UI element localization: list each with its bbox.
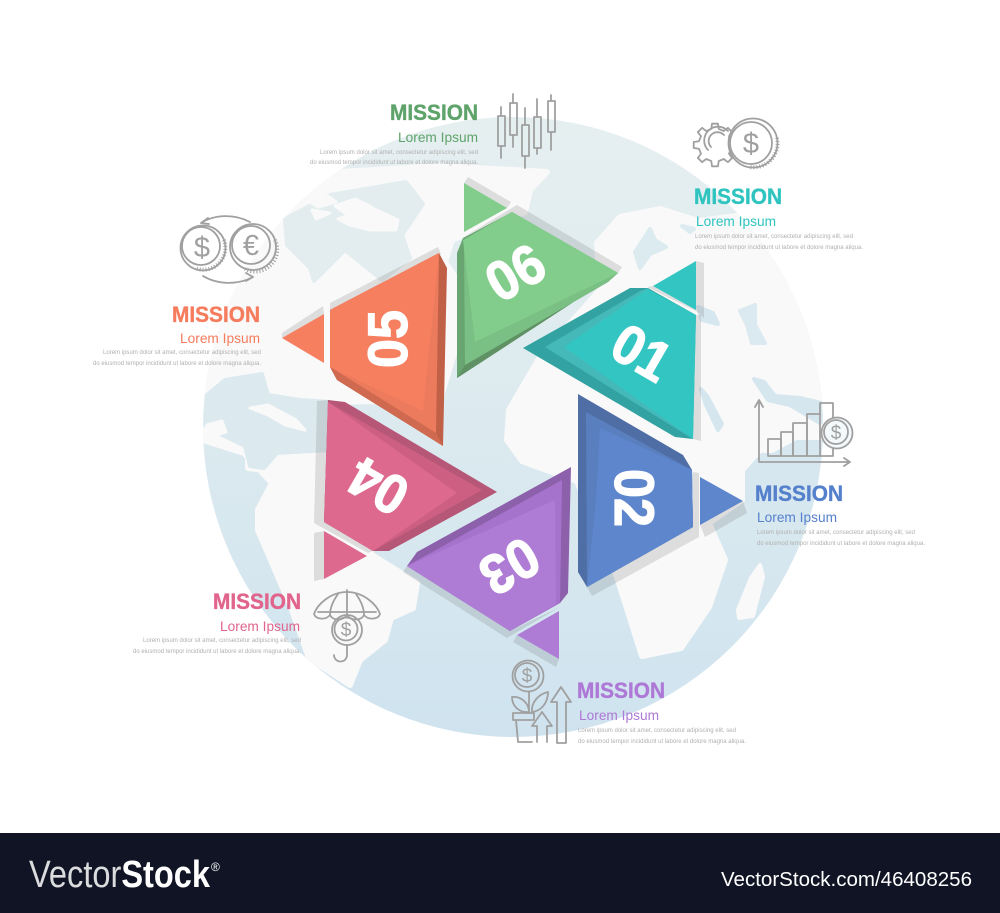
icon: bar chart with coin [755, 400, 852, 466]
number 04: 04 [337, 445, 419, 528]
panel: segment 03 [403, 467, 571, 667]
small marker shadow 03 [513, 635, 559, 667]
segment 01 body [523, 288, 696, 439]
text block: mission 03: Lorem ipsum dolor sit amet, consectetur adipiscing elit, sed [578, 727, 736, 734]
text block: mission 03: Lorem Ipsum [579, 707, 659, 723]
number 06: 06 [474, 231, 556, 314]
text block: mission 01: MISSION [694, 184, 782, 209]
text block: mission 02: Lorem Ipsum [757, 509, 837, 525]
text block: mission 04: Lorem Ipsum [220, 618, 300, 634]
segment 02 shadow [587, 472, 699, 596]
text block: mission 04: do eiusmod tempor incididunt ut labore et dolore magna aliqua. [133, 648, 301, 655]
text block: mission 03: MISSION [577, 678, 665, 703]
text block: mission 02: do eiusmod tempor incididunt ut labore et dolore magna aliqua. [757, 540, 925, 547]
segment 05 body [330, 253, 447, 446]
segment 04 body [324, 400, 497, 551]
number 01: 01 [601, 311, 683, 394]
text block: mission 01: do eiusmod tempor incididunt ut labore et dolore magna aliqua. [695, 244, 863, 251]
text block: mission 02 [755, 481, 925, 547]
segment 03 shadow [403, 566, 560, 638]
small marker shadow 04 [314, 531, 324, 581]
small marker shadow 06 [464, 177, 511, 208]
icon: umbrella over coin [314, 590, 380, 662]
footer registered mark: ® [211, 860, 220, 874]
small marker shadow 05 [282, 306, 324, 338]
text block: mission 06: Lorem Ipsum [398, 129, 478, 145]
text block: mission 06: Lorem ipsum dolor sit amet, consectetur adipiscing elit, sed [320, 149, 478, 156]
icon: currency exchange [180, 216, 277, 283]
segment 06 shadow [462, 205, 622, 273]
small marker shadow 01 [647, 261, 704, 318]
small marker 03 [517, 611, 559, 659]
small marker 02 [700, 477, 743, 525]
icon: gear and dollar coin [694, 118, 778, 168]
world globe background [190, 117, 840, 737]
text block: mission 03: do eiusmod tempor incididunt ut labore et dolore magna aliqua. [578, 738, 746, 745]
panel: segment 02 [578, 394, 747, 596]
icon: candlestick chart [498, 94, 555, 168]
text block: mission 05: do eiusmod tempor incididunt ut labore et dolore magna aliqua. [93, 360, 261, 367]
icon: gear and dollar coin: $ [743, 128, 759, 160]
text block: mission 04: Lorem ipsum dolor sit amet, consectetur adipiscing elit, sed [143, 637, 301, 644]
icon: coin plant with arrows: $ [522, 666, 533, 687]
segment 03 body [407, 467, 571, 631]
text block: mission 06 [310, 100, 478, 166]
panel: segment 04 [314, 400, 497, 581]
footer url: VectorStock.com/46408256 [721, 869, 972, 891]
icon: currency exchange: € [243, 230, 259, 262]
icon: bar chart with coin: $ [831, 423, 842, 444]
segment 04 shadow [314, 400, 373, 553]
footer logo: VectorStock [29, 854, 211, 896]
text block: mission 01: Lorem ipsum dolor sit amet, consectetur adipiscing elit, sed [695, 233, 853, 240]
number 02: 02 [603, 469, 666, 527]
text block: mission 01 [694, 184, 863, 251]
text block: mission 03 [577, 678, 746, 745]
text block: mission 02: MISSION [755, 481, 843, 506]
footer bar [0, 833, 1000, 913]
number 03: 03 [469, 525, 551, 608]
panel: segment 06 [457, 177, 622, 378]
number 05: 05 [356, 310, 419, 368]
icon: umbrella over coin: $ [341, 620, 352, 641]
text block: mission 05 [93, 302, 261, 367]
small marker 06 [464, 183, 507, 232]
text block: mission 02: Lorem ipsum dolor sit amet, consectetur adipiscing elit, sed [757, 529, 915, 536]
small marker 04 [324, 531, 367, 579]
text block: mission 06: MISSION [390, 100, 478, 125]
text block: mission 05: MISSION [172, 302, 260, 327]
segment 02 body [578, 394, 693, 587]
text block: mission 01: Lorem Ipsum [696, 213, 776, 229]
text block: mission 04 [133, 589, 301, 655]
panel: segment 05 [282, 247, 447, 446]
segment 05 shadow [330, 247, 441, 310]
text block: mission 06: do eiusmod tempor incididunt ut labore et dolore magna aliqua. [310, 159, 478, 166]
small marker 01 [653, 261, 696, 310]
segment 01 shadow [693, 315, 701, 441]
text block: mission 05: Lorem ipsum dolor sit amet, consectetur adipiscing elit, sed [103, 349, 261, 356]
icon: currency exchange: $ [194, 232, 210, 264]
text block: mission 05: Lorem Ipsum [180, 330, 260, 346]
icon: coin plant with arrows [512, 660, 571, 743]
small marker shadow 02 [700, 501, 747, 537]
text block: mission 04: MISSION [213, 589, 301, 614]
segment 06 body [457, 212, 618, 378]
panel: segment 01 [523, 261, 704, 441]
small marker 05 [282, 314, 324, 363]
